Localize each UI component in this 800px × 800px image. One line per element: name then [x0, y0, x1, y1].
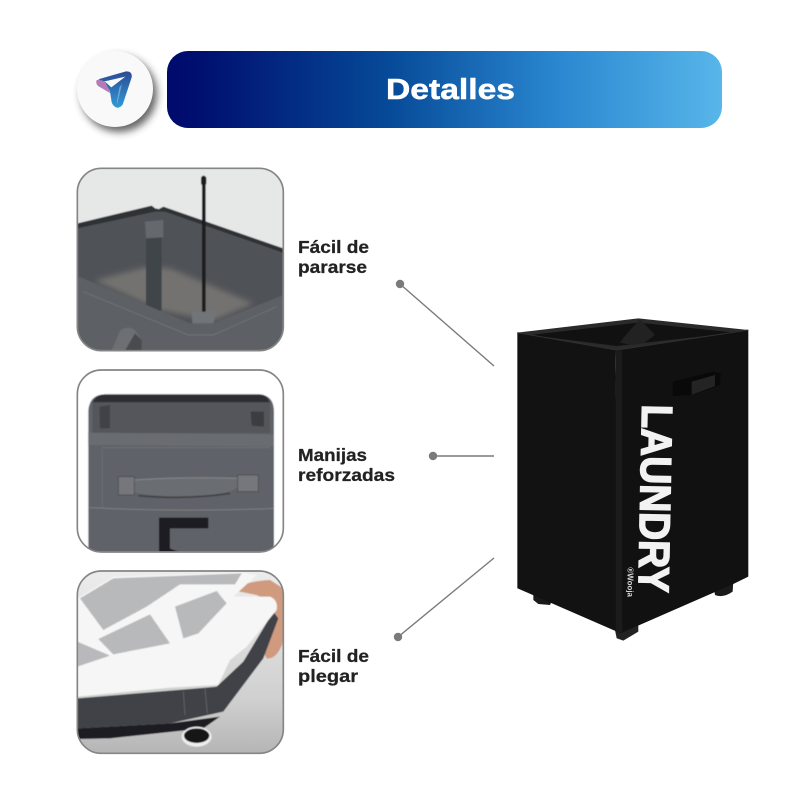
label: easy to fold: Fácil de: [298, 646, 369, 666]
wheels: [533, 595, 552, 605]
label: reinforced handles: Manijas: [298, 445, 367, 465]
logo badge: [77, 51, 157, 132]
left side: [517, 333, 621, 633]
right side: [615, 330, 748, 633]
title banner: [167, 51, 722, 128]
icon: paper plane logo: [96, 71, 132, 108]
panel: easy to stand photo: [77, 168, 283, 351]
product: laundry basket: [517, 318, 748, 641]
panel: reinforced handles photo: [77, 370, 283, 552]
white fabric: [77, 572, 277, 697]
label: reinforced handles line 2: reforzadas: [298, 465, 395, 485]
label: easy to stand line 2: pararse: [298, 257, 367, 277]
hand: [238, 580, 282, 659]
LAUNDRY: LAUNDRY: [629, 404, 681, 593]
top opening: [517, 318, 748, 351]
brand mark: ®Wooja: [625, 567, 634, 598]
label: easy to stand: Fácil de: [298, 237, 369, 257]
handle: [673, 372, 721, 396]
dark basket body: [77, 612, 278, 728]
connector: top: [396, 280, 494, 366]
connector: bottom: [394, 558, 494, 641]
panel: easy to fold photo: [77, 571, 283, 753]
title: Detalles: [386, 74, 515, 106]
label: easy to fold line 2: plegar: [298, 666, 358, 686]
connector: middle: [429, 452, 494, 460]
